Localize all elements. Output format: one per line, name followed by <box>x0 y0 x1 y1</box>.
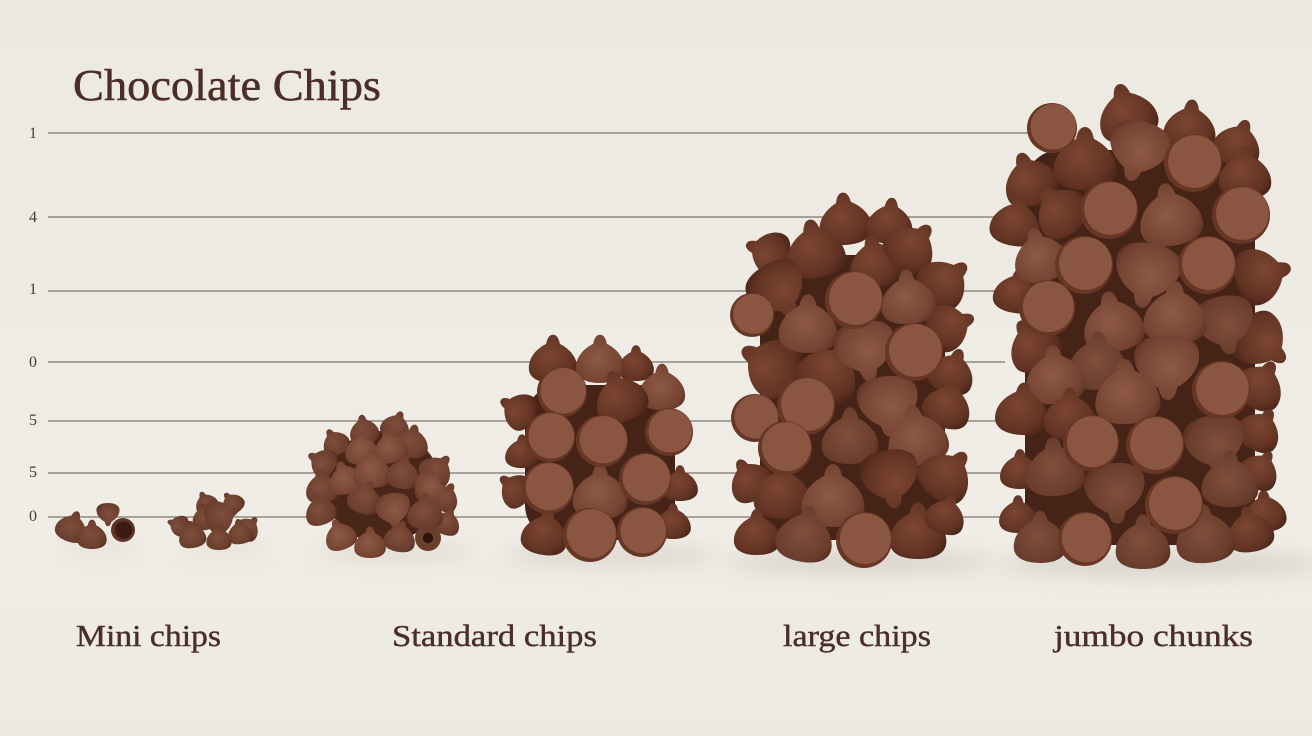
y axis with gridlines: 0 <box>29 508 37 525</box>
y axis with gridlines: 5 <box>29 412 37 429</box>
y axis with gridlines: 0 <box>29 354 37 371</box>
title: Chocolate Chips <box>73 61 381 110</box>
label: standard chips: Standard chips <box>392 618 597 653</box>
label: mini chips: Mini chips <box>76 618 221 653</box>
y axis with gridlines: 4 <box>29 209 37 226</box>
pile: mini chips, second cluster <box>164 486 266 550</box>
pile: standard chips (small pile) <box>300 407 465 558</box>
y axis with gridlines: 1 <box>29 281 37 298</box>
pile: large chips <box>719 190 986 568</box>
y axis with gridlines <box>29 125 1035 525</box>
y axis with gridlines: 5 <box>29 464 37 481</box>
pile: mini chips, first cluster <box>52 503 135 549</box>
ground shadows <box>60 543 1312 574</box>
label: large chips: large chips <box>783 618 931 653</box>
label: jumbo chunks: jumbo chunks <box>1053 618 1253 653</box>
y axis with gridlines: 1 <box>29 125 37 142</box>
pile: jumbo chunks <box>987 77 1303 569</box>
pile: large chips (standard-sized discs) <box>489 335 698 562</box>
